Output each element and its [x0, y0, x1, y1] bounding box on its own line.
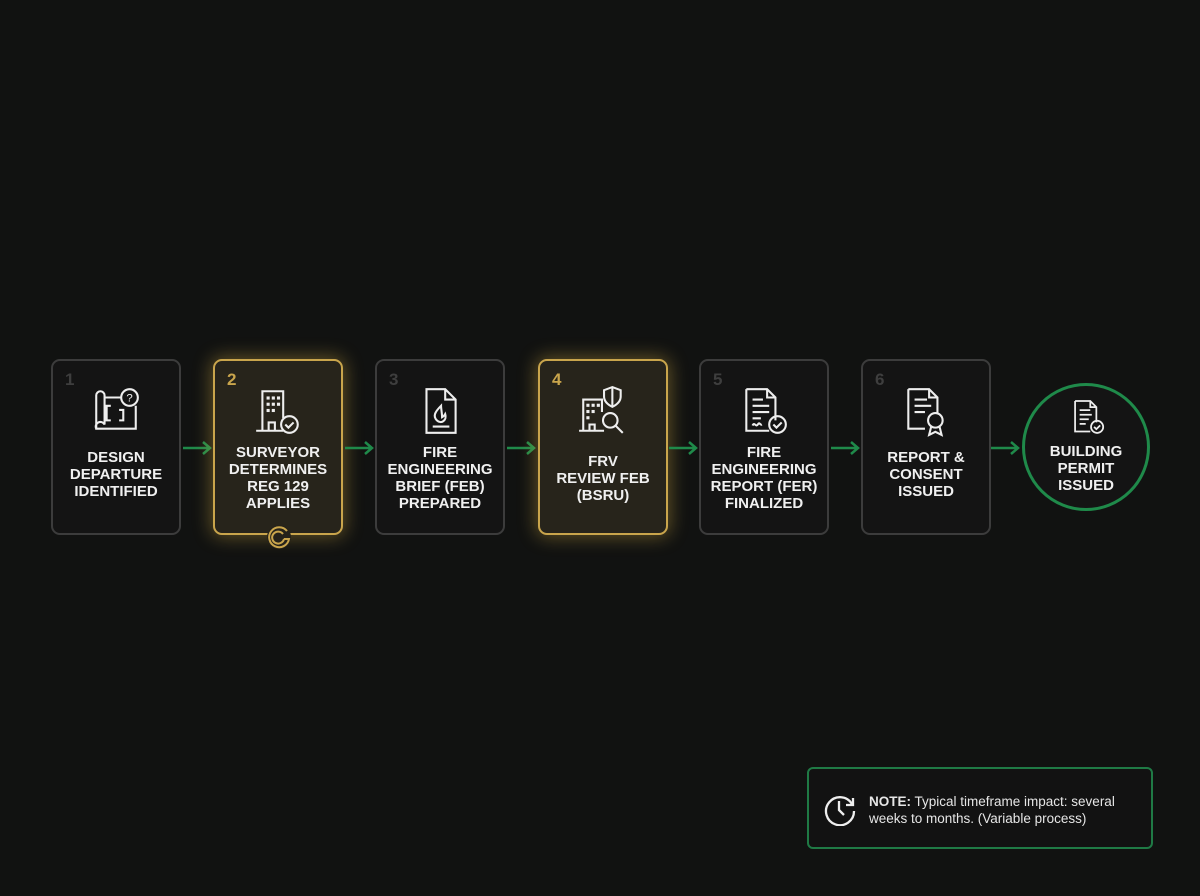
step 4 — [538, 359, 668, 535]
icon: blueprint question: ? — [126, 393, 133, 405]
step 1: IDENTIFIED — [74, 483, 158, 500]
step 2: SURVEYOR — [236, 444, 320, 461]
step 4: FRV — [588, 453, 618, 470]
step 2: REG 129 — [247, 478, 309, 495]
step 3 — [375, 359, 505, 535]
step 6 — [861, 359, 991, 535]
step 3: 3 — [389, 370, 398, 389]
step 5: FINALIZED — [725, 495, 803, 512]
step 5 — [699, 359, 829, 535]
note callout — [807, 767, 1153, 849]
step 2: APPLIES — [246, 495, 310, 512]
arrow 1 — [183, 441, 212, 455]
arrow 5 — [831, 441, 860, 455]
step 5: FIRE — [747, 444, 781, 461]
step 4: (BSRU) — [577, 487, 629, 504]
arrow 4 — [669, 441, 698, 455]
final: building permit issued: PERMIT — [1058, 460, 1114, 477]
icon: building shield magnifier — [579, 386, 624, 434]
final: building permit issued: BUILDING — [1050, 443, 1122, 460]
final: building permit issued — [1022, 383, 1150, 511]
step 3: FIRE — [423, 444, 457, 461]
arrow 3 — [507, 441, 536, 455]
step 3: ENGINEERING — [387, 461, 492, 478]
step 4: 4 — [552, 370, 561, 389]
icon: blueprint question — [94, 388, 139, 430]
step 1: DEPARTURE — [70, 466, 162, 483]
logo G — [267, 526, 291, 549]
step 5: REPORT (FER) — [711, 478, 817, 495]
step 6: ISSUED — [898, 483, 954, 500]
step 1: DESIGN — [87, 449, 145, 466]
icon: document flame — [425, 388, 457, 434]
step 6: CONSENT — [889, 466, 963, 483]
step 2: 2 — [227, 370, 236, 389]
final: building permit issued: ISSUED — [1058, 477, 1114, 494]
step 2: DETERMINES — [229, 461, 327, 478]
step 3: PREPARED — [399, 495, 481, 512]
icon: signed document check — [745, 388, 787, 434]
step 5: ENGINEERING — [711, 461, 816, 478]
step 6: 6 — [875, 370, 884, 389]
icon: certificate ribbon — [907, 388, 944, 437]
step 1: 1 — [65, 370, 74, 389]
step 3: BRIEF (FEB) — [395, 478, 485, 495]
step 5: 5 — [713, 370, 722, 389]
arrow 6 — [991, 441, 1020, 455]
note text: NOTE: Typical timeframe impact: several weeks to months. (Variable process) — [869, 794, 1115, 826]
icon: building check — [256, 390, 299, 434]
arrow 2 — [345, 441, 374, 455]
step 1 — [51, 359, 181, 535]
step 2 — [213, 359, 343, 535]
icon: permit document — [1074, 400, 1104, 434]
step 6: REPORT & — [887, 449, 965, 466]
icon: clock refresh — [824, 796, 856, 826]
step 4: REVIEW FEB — [556, 470, 650, 487]
